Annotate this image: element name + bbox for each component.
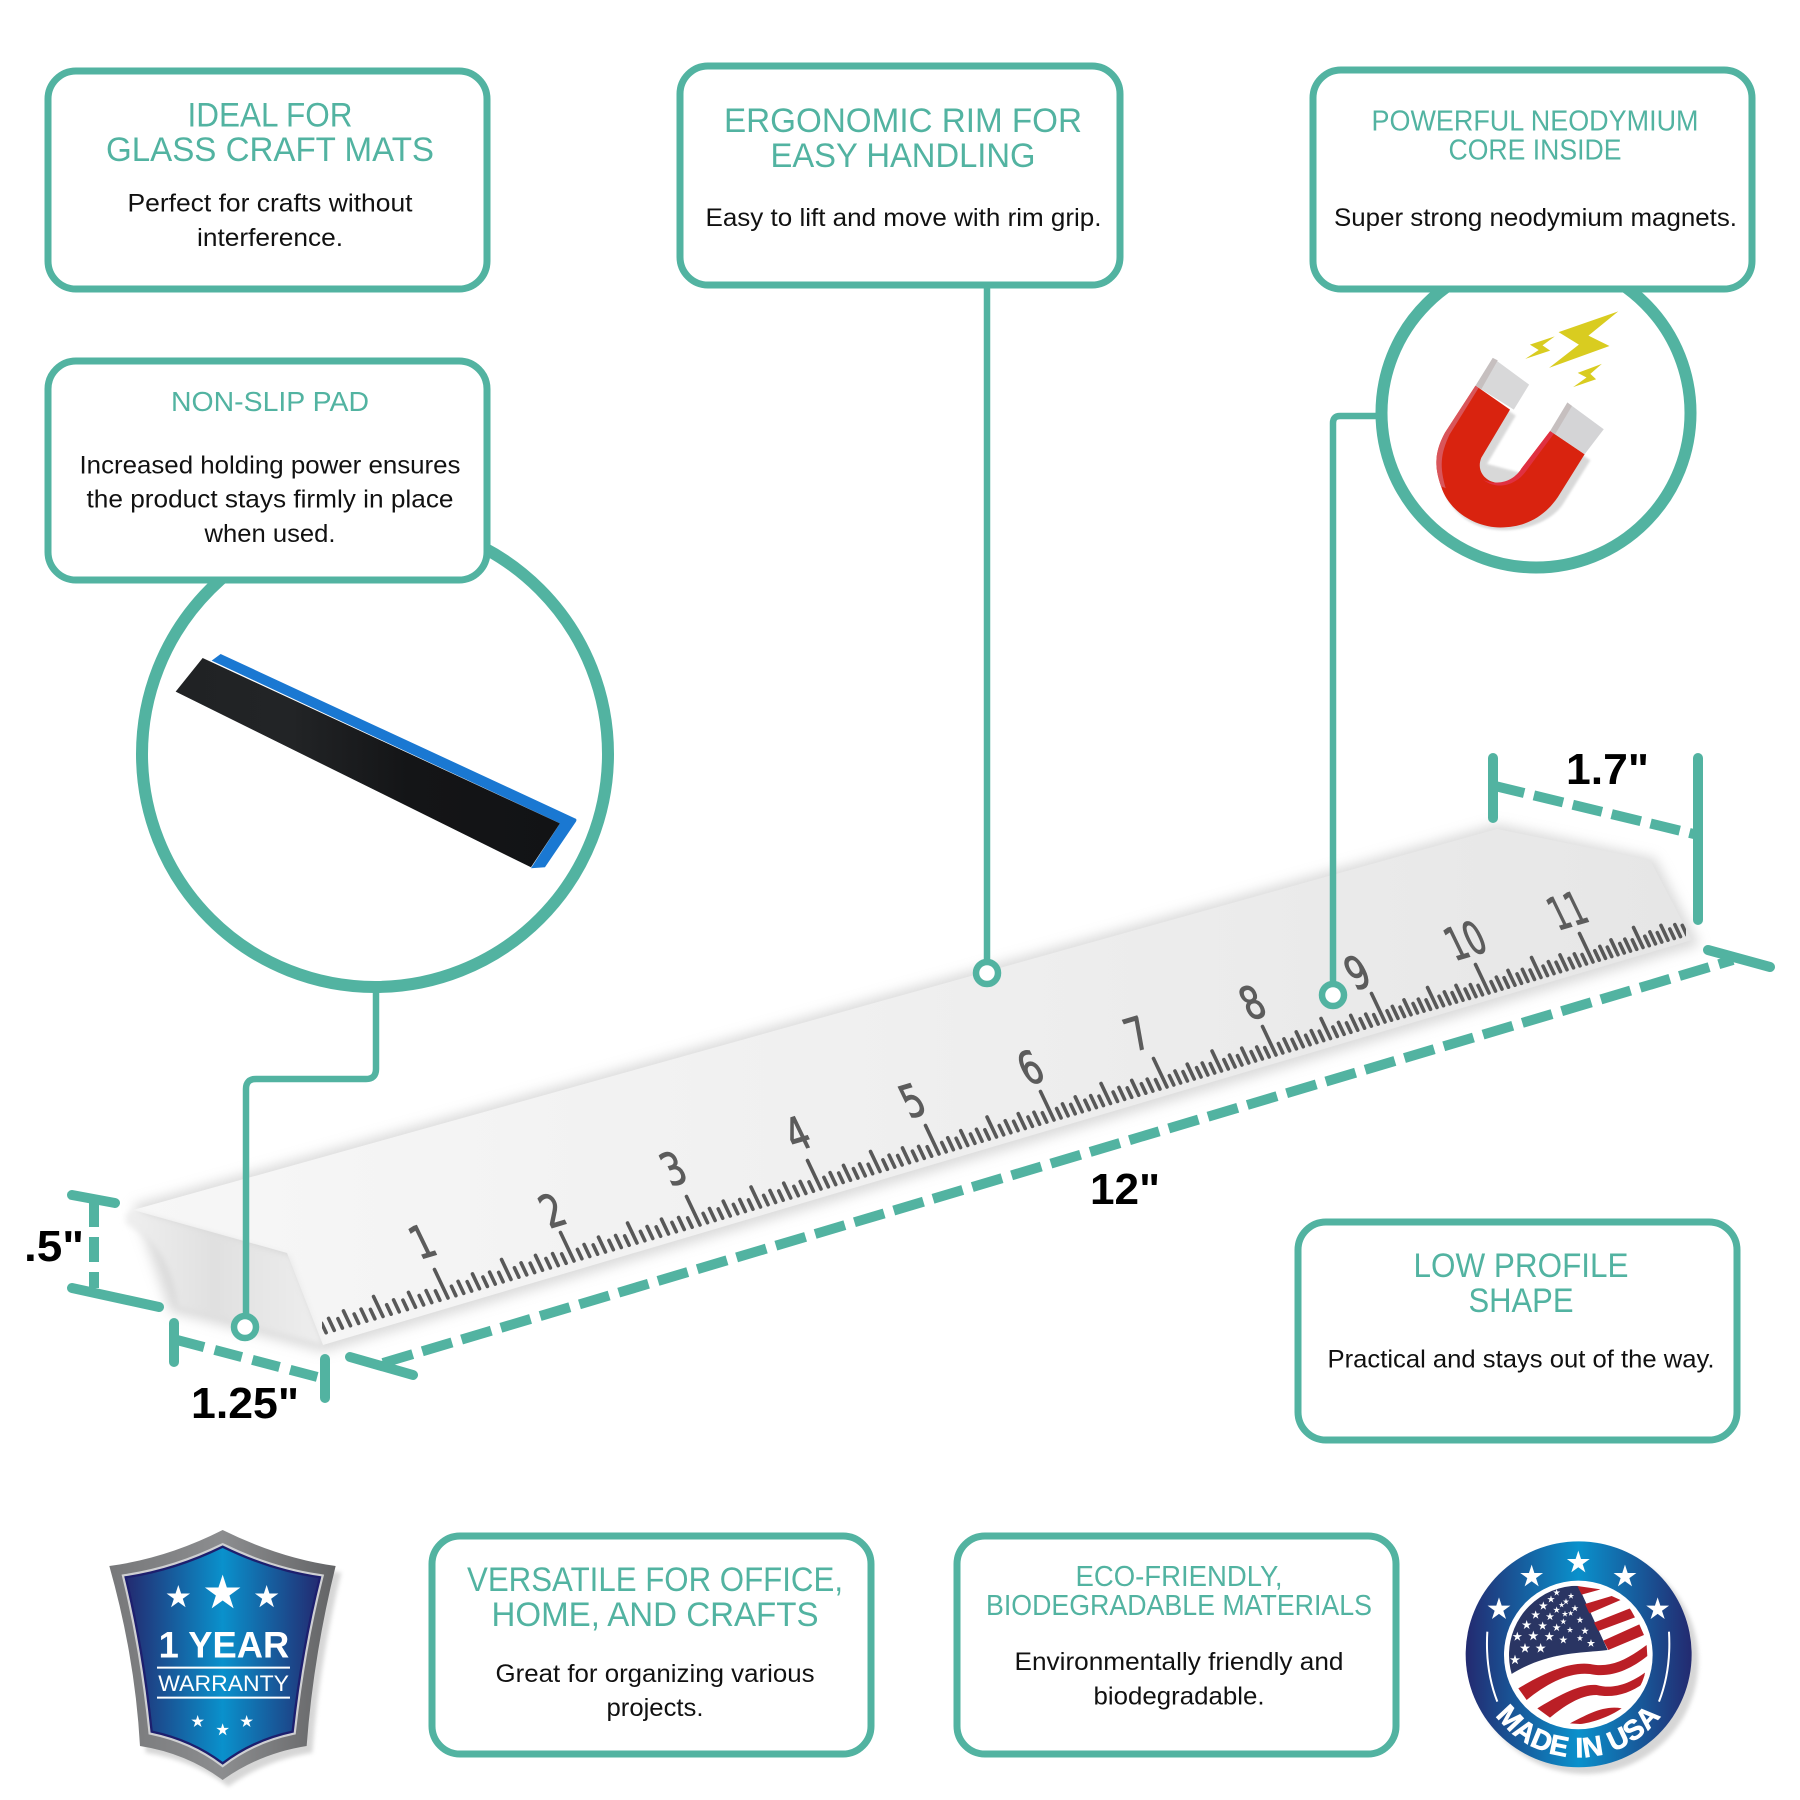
- heading: ECO-FRIENDLY,: [1076, 1561, 1282, 1593]
- magnet body: [1436, 386, 1585, 527]
- heading: NON-SLIP PAD: [171, 386, 369, 417]
- dimension: length 12 inches: 12": [1090, 1165, 1160, 1214]
- curved badge text: MADE IN USA: [1496, 1704, 1662, 1758]
- ruler product: [125, 824, 1700, 1352]
- heading: IDEAL FOR: [188, 96, 352, 134]
- shield shadow: [115, 1537, 341, 1787]
- panel: powerful neodymium core: [1313, 70, 1752, 289]
- icon: black and blue pad: [176, 654, 576, 868]
- heading: BIODEGRADABLE MATERIALS: [986, 1590, 1372, 1622]
- body text: Super strong neodymium magnets.: [1334, 204, 1737, 232]
- ruler inch numbers: [401, 883, 1597, 1270]
- dimension: base 1.25 inch: [174, 1323, 325, 1428]
- magnet shadow: [1445, 392, 1590, 530]
- body text: Environmentally friendly and: [1014, 1648, 1344, 1676]
- ruler tick marks: [304, 906, 1687, 1335]
- heading: EASY HANDLING: [770, 137, 1036, 175]
- connector: ergonomic rim to ruler: [976, 286, 998, 984]
- ruler body: [133, 829, 1692, 1345]
- connector: magnet core to ruler: [1322, 416, 1380, 1006]
- ruler shadow: [133, 824, 1700, 1352]
- body text: Perfect for crafts without: [128, 190, 413, 218]
- icon: waving US flag: [1497, 1583, 1647, 1724]
- shield face: [126, 1547, 320, 1763]
- body text: the product stays firmly in place: [86, 486, 454, 514]
- badge shadow: [1472, 1548, 1698, 1774]
- body text: projects.: [606, 1694, 704, 1722]
- body text: when used.: [203, 520, 336, 548]
- dimension: end width 1.7 inch: [1493, 745, 1698, 920]
- heading: LOW PROFILE: [1414, 1247, 1628, 1285]
- panel: ideal for glass craft mats: [48, 71, 487, 289]
- circle: magnet detail: [1382, 258, 1690, 568]
- dimension: end width 1.7 inch: 1.7": [1566, 745, 1649, 794]
- body text: Increased holding power ensures: [80, 452, 460, 480]
- circle: non-slip pad detail: [142, 521, 608, 987]
- shield frame: [109, 1530, 336, 1780]
- shield stars: [167, 1575, 278, 1735]
- heading: ERGONOMIC RIM FOR: [724, 102, 1082, 140]
- heading: HOME, AND CRAFTS: [492, 1596, 818, 1634]
- body text: Practical and stays out of the way.: [1328, 1346, 1714, 1374]
- panel: versatile: [432, 1536, 871, 1754]
- panel: non-slip pad: [48, 361, 487, 580]
- ruler inch numbers: 8: [1231, 976, 1275, 1031]
- panel: low profile shape: [1298, 1222, 1737, 1440]
- badge disc: [1466, 1541, 1692, 1767]
- ruler inch numbers: 10: [1436, 912, 1496, 972]
- flag circle: [1504, 1581, 1653, 1729]
- ruler inch numbers: 7: [1116, 1007, 1160, 1062]
- ruler inch numbers: 4: [776, 1107, 820, 1162]
- ruler inch numbers: 1: [401, 1215, 445, 1270]
- shield text: [157, 1624, 290, 1698]
- ruler left end face: [125, 1210, 323, 1345]
- body text: biodegradable.: [1094, 1682, 1264, 1710]
- badge stars: [1488, 1551, 1669, 1619]
- heading: POWERFUL NEODYMIUM: [1372, 106, 1698, 138]
- heading: GLASS CRAFT MATS: [106, 131, 434, 169]
- connector: non-slip pad to ruler: [234, 990, 376, 1338]
- badge: made in USA: [1466, 1541, 1700, 1776]
- panel: ergonomic rim: [680, 66, 1120, 285]
- ruler inch numbers: 2: [531, 1184, 575, 1239]
- ruler inch numbers: 9: [1336, 946, 1380, 1001]
- body text: Great for organizing various: [496, 1660, 814, 1688]
- shield text: WARRANTY: [158, 1671, 289, 1696]
- heading: VERSATILE FOR OFFICE,: [467, 1561, 843, 1599]
- badge: 1 year warranty shield: [109, 1530, 341, 1787]
- dimension: height .5 inch: [24, 1195, 159, 1307]
- ruler inch numbers: 5: [891, 1074, 935, 1129]
- dimension: length 12 inches: [350, 950, 1770, 1375]
- shield text: 1 YEAR: [159, 1624, 289, 1666]
- panel: eco-friendly: [957, 1536, 1396, 1754]
- body text: Easy to lift and move with rim grip.: [706, 204, 1102, 232]
- heading: CORE INSIDE: [1448, 134, 1622, 166]
- body text: interference.: [197, 224, 343, 252]
- ruler inch numbers: 11: [1540, 883, 1597, 941]
- dimension: base 1.25 inch: 1.25": [191, 1379, 299, 1428]
- ruler inch numbers: 6: [1009, 1041, 1053, 1096]
- dimension: height .5 inch: .5": [24, 1222, 84, 1271]
- icon: horseshoe magnet with lightning: [1436, 311, 1618, 530]
- ruler inch numbers: 3: [652, 1142, 696, 1197]
- heading: SHAPE: [1468, 1282, 1574, 1320]
